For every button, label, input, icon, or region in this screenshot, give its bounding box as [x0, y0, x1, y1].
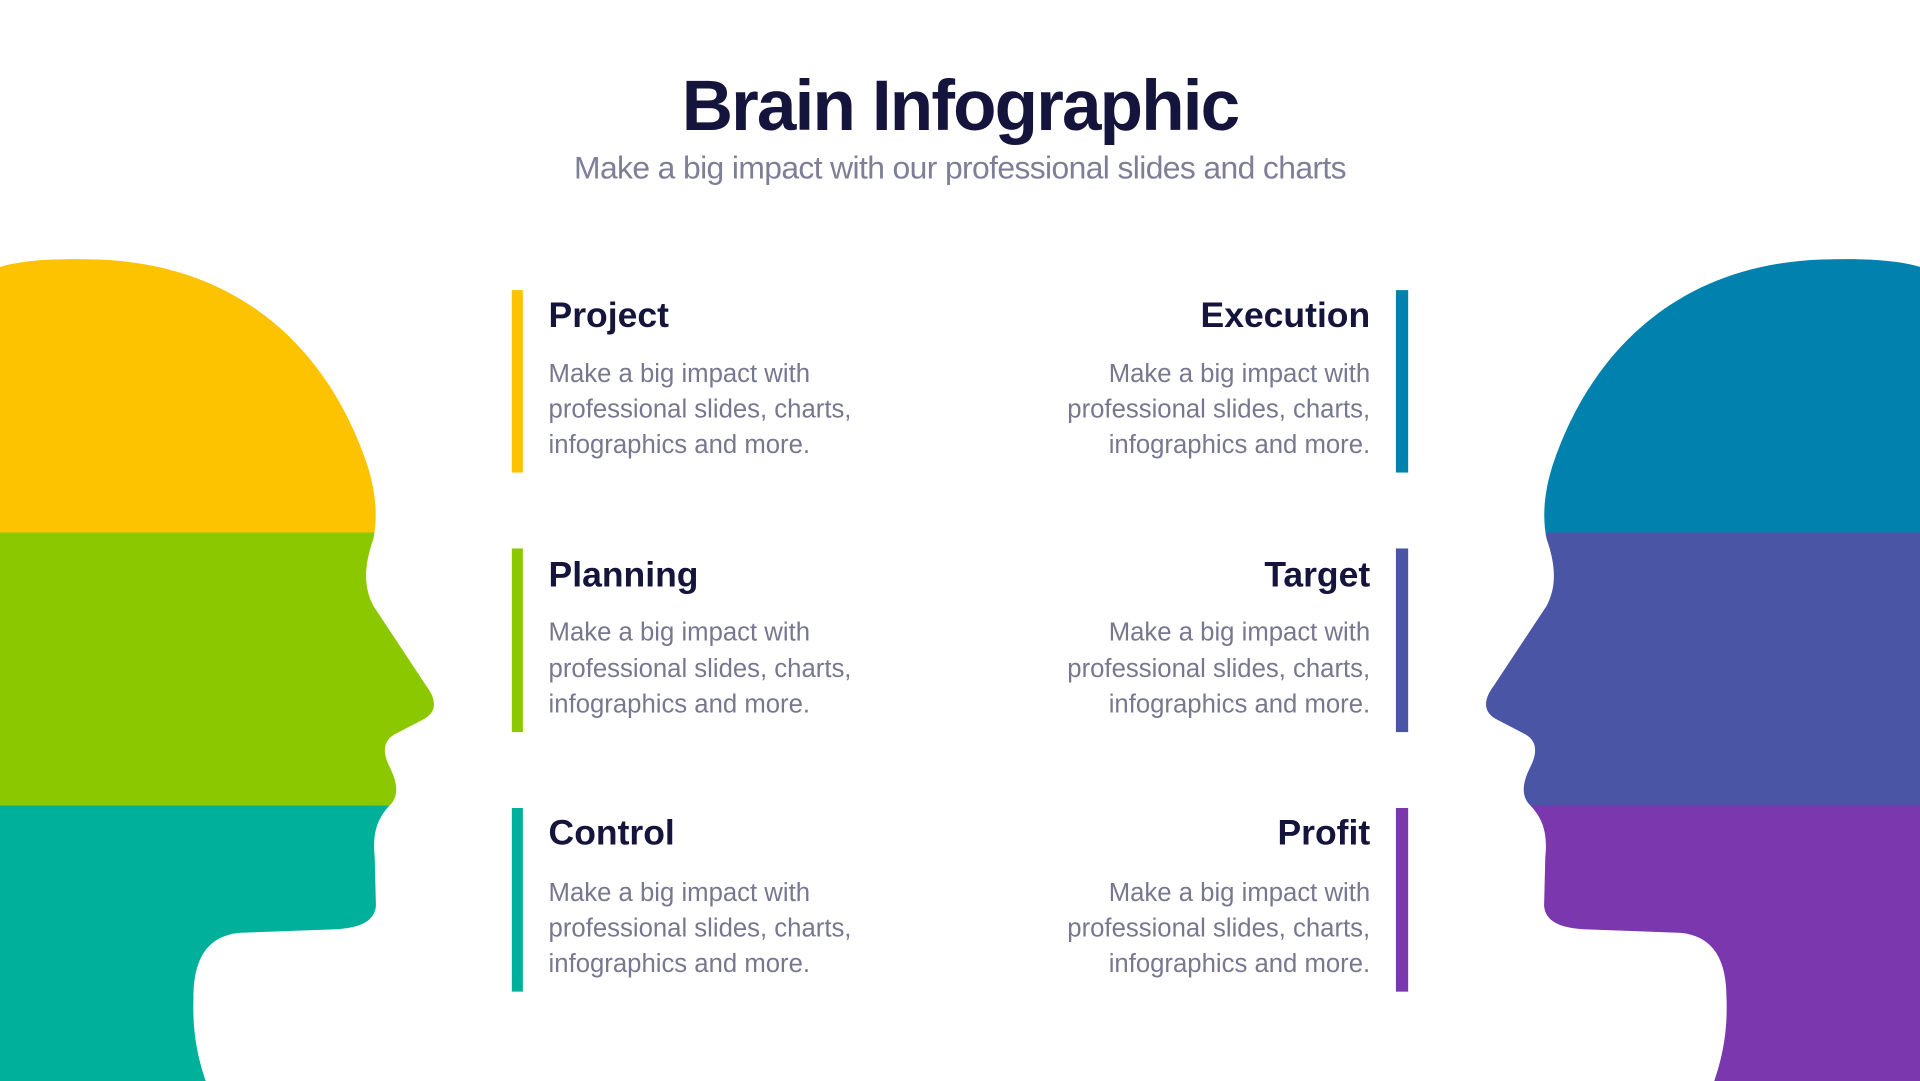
- item: Control: Control: [549, 813, 675, 853]
- subtitle: Make a big impact with our professional slides and charts: [574, 150, 1346, 186]
- item: Project: [512, 290, 851, 473]
- item: Target: infographics and more.: [1109, 691, 1370, 719]
- right head: [1486, 259, 1920, 1081]
- item: Execution: infographics and more.: [1109, 431, 1370, 459]
- item: Planning: Planning: [549, 554, 698, 594]
- item: Profit: professional slides, charts,: [1067, 915, 1370, 943]
- item: Profit: Profit: [1278, 813, 1370, 853]
- item: Target: Make a big impact with: [1109, 618, 1370, 646]
- item: Control: [512, 808, 851, 992]
- item: Control: Make a big impact with: [549, 879, 810, 907]
- item: Target: [1067, 548, 1408, 732]
- title: Brain Infographic: [682, 67, 1239, 146]
- item: Control: professional slides, charts,: [549, 915, 851, 943]
- item: Project: Project: [549, 295, 669, 335]
- item: Profit: infographics and more.: [1109, 950, 1370, 978]
- item: Execution: Execution: [1201, 295, 1370, 335]
- item: Planning: [512, 548, 851, 732]
- item: Execution: [1067, 290, 1408, 473]
- item: Profit: [1067, 808, 1408, 992]
- item: Execution: professional slides, charts,: [1067, 395, 1370, 423]
- item: Project: Make a big impact with: [549, 360, 810, 388]
- left head: [0, 259, 434, 1081]
- item: Target: Target: [1264, 554, 1370, 594]
- item: Profit: Make a big impact with: [1109, 879, 1370, 907]
- item: Control: infographics and more.: [549, 950, 810, 978]
- item: Project: infographics and more.: [549, 431, 810, 459]
- item: Planning: Make a big impact with: [549, 618, 810, 646]
- item: Project: professional slides, charts,: [549, 395, 851, 423]
- item: Execution: Make a big impact with: [1109, 360, 1370, 388]
- item: Planning: professional slides, charts,: [549, 655, 851, 683]
- item: Planning: infographics and more.: [549, 691, 810, 719]
- item: Target: professional slides, charts,: [1067, 655, 1370, 683]
